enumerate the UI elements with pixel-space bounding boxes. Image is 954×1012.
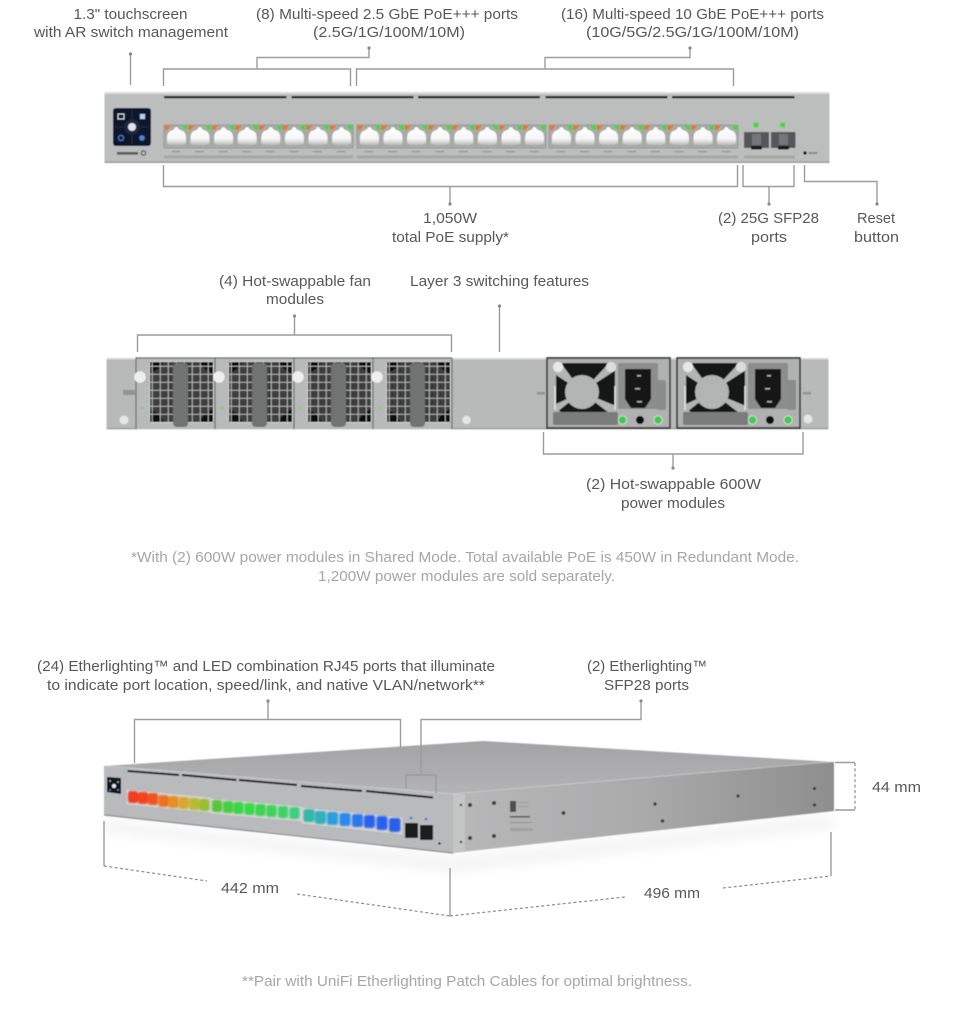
port group: 10 GbE 17-24	[549, 125, 738, 152]
Etherlighting ports	[128, 791, 400, 832]
label: 2.5 GbE ports: (8) Multi-speed 2.5 GbE PoE+++ ports	[256, 6, 518, 23]
panel: switch rear view	[106, 358, 828, 429]
label: SFP28 ports: (2) 25G SFP28	[718, 210, 819, 227]
label: reset button: Reset	[857, 210, 896, 227]
SFP28 ports	[744, 122, 796, 150]
bracket: PoE supply	[164, 165, 738, 206]
panel: switch 3D view	[104, 741, 834, 872]
label: touchscreen: with AR switch management	[33, 24, 229, 41]
port group frames	[127, 790, 402, 834]
label: SFP28 ports: ports	[751, 229, 787, 246]
callout line: reset button	[804, 165, 879, 206]
bracket: fan modules	[138, 314, 452, 352]
dimension: height	[835, 762, 921, 810]
rear labels	[123, 390, 811, 395]
dimension: width	[104, 821, 450, 916]
label: Etherlighting RJ45 ports	[37, 658, 495, 694]
bracket: SFP28 ports	[406, 699, 643, 793]
bracket: 10 GbE ports	[356, 46, 734, 86]
side screws	[460, 787, 816, 843]
label: fan modules	[219, 273, 371, 308]
ventilation slots	[164, 96, 794, 98]
label: total PoE supply: 1,050W	[423, 210, 478, 227]
label: 10 GbE ports	[561, 6, 824, 41]
fan modules	[134, 358, 452, 429]
footnote: power modules	[131, 549, 799, 585]
front face	[104, 766, 453, 853]
label: fan modules: (4) Hot-swappable fan	[219, 273, 371, 290]
callout line: layer 3 features	[498, 304, 501, 352]
bracket: SFP28 ports	[743, 165, 794, 206]
label: power modules: power modules	[621, 495, 725, 512]
SFP28 ports with LEDs	[405, 817, 433, 840]
rear screws	[120, 414, 812, 424]
port group: 2.5 GbE 1-8	[164, 125, 353, 152]
label: reset button: button	[854, 229, 899, 246]
bracket: RJ45 ports	[134, 699, 400, 787]
footnote: power modules: 1,200W power modules are sold separately.	[318, 568, 615, 585]
label: layer 3 features: Layer 3 switching features	[410, 273, 589, 290]
label: Etherlighting SFP28 ports: (2) Etherlighting™	[587, 658, 707, 675]
label: total PoE supply	[392, 210, 509, 246]
dimension: depth	[450, 832, 831, 916]
top face	[104, 741, 834, 794]
label: power modules: (2) Hot-swappable 600W	[586, 476, 762, 493]
ventilation slots	[128, 771, 433, 798]
reset hole	[438, 842, 441, 845]
power modules	[547, 358, 800, 428]
reflection	[105, 815, 832, 872]
port group: 10 GbE 9-16	[357, 125, 546, 152]
side label	[510, 801, 533, 831]
footnote: power modules: *With (2) 600W power modules in Shared Mode. Total available PoE is 450W in Redundant Mode.	[131, 549, 799, 566]
callout line: touchscreen	[129, 52, 132, 85]
label: touchscreen	[33, 6, 229, 41]
dimension: height: 44 mm	[872, 779, 921, 796]
panel: switch front view	[104, 92, 830, 163]
side face	[453, 762, 834, 853]
bracket: 2.5 GbE ports	[164, 46, 371, 86]
port number strips	[164, 156, 795, 158]
label: fan modules: modules	[266, 291, 324, 308]
label: SFP28 ports	[718, 210, 819, 246]
label: 10 GbE ports: (16) Multi-speed 10 GbE PoE+++ ports	[561, 6, 824, 23]
label: total PoE supply: total PoE supply*	[392, 229, 509, 246]
bracket: power modules	[544, 432, 803, 470]
label: Etherlighting RJ45 ports: to indicate port location, speed/link, and native VLAN/network**	[47, 677, 485, 694]
label: 2.5 GbE ports	[256, 6, 518, 41]
label: Etherlighting RJ45 ports: (24) Etherlighting™ and LED combination RJ45 ports that illuminate	[37, 658, 495, 675]
label: touchscreen: 1.3" touchscreen	[74, 6, 188, 23]
icon: touchscreen display	[113, 108, 151, 146]
touchscreen	[107, 777, 121, 794]
label: reset button	[854, 210, 899, 246]
reset button	[803, 151, 818, 155]
dimension: width: 442 mm	[221, 880, 279, 897]
brand mark	[117, 151, 146, 155]
label: Etherlighting SFP28 ports: SFP28 ports	[604, 677, 689, 694]
label: 10 GbE ports: (10G/5G/2.5G/1G/100M/10M)	[586, 24, 799, 41]
label: 2.5 GbE ports: (2.5G/1G/100M/10M)	[313, 24, 465, 41]
label: power modules	[586, 476, 762, 512]
footnote: patch cables: **Pair with UniFi Etherlighting Patch Cables for optimal brightness.	[242, 973, 692, 990]
dimension: depth: 496 mm	[644, 885, 700, 902]
label: Etherlighting SFP28 ports	[587, 658, 707, 694]
